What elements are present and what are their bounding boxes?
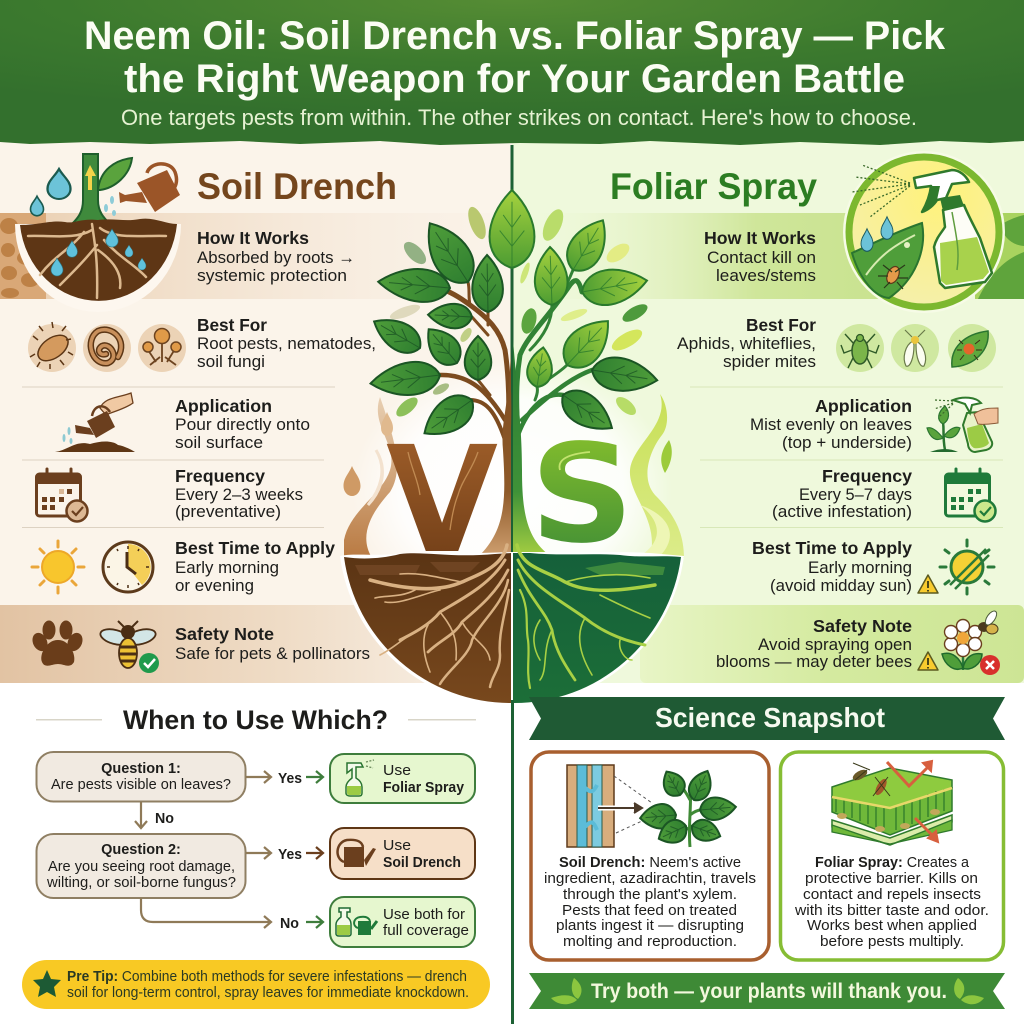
banner: try both: Try both — your plants will thank you. <box>591 980 947 1003</box>
title: the Right Weapon for Your Garden Battle <box>124 57 905 101</box>
text: best time: or evening <box>175 577 254 595</box>
icon: watering can <box>119 164 180 212</box>
icon: crossed-out sun <box>940 540 994 594</box>
text: foliar spray science <box>794 855 989 950</box>
arrow: question 1 no: No <box>155 811 174 827</box>
icon: hand spraying plant <box>927 398 998 452</box>
banner: science snapshot <box>529 697 1005 740</box>
text: best for: soil fungi <box>197 353 265 371</box>
text: application: Application <box>815 396 912 416</box>
vapor wisp: soil side <box>344 397 397 558</box>
text: frequency: (active infestation) <box>772 503 912 521</box>
text: how it works: How It Works <box>704 228 816 248</box>
icon: xylem cross-section <box>567 765 655 847</box>
arrow: question 2 yes <box>246 847 323 863</box>
band: soil drench how it works <box>0 213 490 299</box>
text: frequency: Every 5–7 days <box>799 486 912 504</box>
tree trunk: spray side <box>513 340 552 557</box>
title: Neem Oil: Soil Drench vs. Foliar Spray — Pick <box>84 14 946 58</box>
icon: flower bee and no sign <box>942 609 1000 675</box>
text: application: soil surface <box>175 434 263 452</box>
banner: try both <box>529 973 1005 1009</box>
text: best for: Best For <box>197 315 267 335</box>
text: safety note: blooms — may deter bees <box>716 653 912 671</box>
text: how it works <box>197 228 355 285</box>
icon: sun <box>32 541 84 593</box>
panel: soil drench content <box>15 154 397 673</box>
subtitle: One targets pests from within. The other strikes on contact. Here's how to choose. <box>121 105 917 130</box>
icon: leaves left <box>551 978 581 1004</box>
text: frequency: Every 2–3 weeks <box>175 486 303 504</box>
text: foliar spray science: with its bitter taste and odor. <box>794 903 989 919</box>
text: application: (top + underside) <box>782 434 912 452</box>
card: foliar spray science <box>780 752 1004 960</box>
text: frequency: Frequency <box>822 466 912 486</box>
text: frequency: (preventative) <box>175 503 281 521</box>
icon: clock <box>103 542 153 592</box>
flow box: question 1 <box>36 752 246 802</box>
text: how it works <box>704 228 816 285</box>
heading: when to use which: When to Use Which? <box>123 705 388 735</box>
text: frequency <box>772 466 912 521</box>
text: best time: Best Time to Apply <box>752 538 912 558</box>
text: foliar spray science: protective barrier. Kills on <box>805 871 978 887</box>
text: best time <box>752 538 912 595</box>
band: foliar spray how it works <box>540 213 1024 299</box>
result: use both: Use both for <box>383 907 465 923</box>
text: soil drench science <box>544 855 756 950</box>
text: how it works: How It Works <box>197 228 309 248</box>
icon: star <box>33 970 61 997</box>
text: best time: (avoid midday sun) <box>770 577 912 595</box>
band: foliar spray safety <box>640 605 1024 683</box>
result: use foliar spray: Use <box>383 763 411 779</box>
text: application <box>175 396 310 452</box>
text: best time: Early morning <box>175 559 279 577</box>
arrow: question 1 yes: Yes <box>278 771 302 787</box>
arrow: question 2 yes: Yes <box>278 847 302 863</box>
text: how it works: Contact kill on <box>707 249 816 267</box>
tip text: soil for long-term control, spray leaves for immediate knockdown. <box>67 985 469 1001</box>
text: best time: Early morning <box>808 559 912 577</box>
tip text <box>67 969 469 1001</box>
text: soil drench science: molting and reproduction. <box>563 934 737 950</box>
text: safety note: Safety Note <box>175 624 274 644</box>
flow box: question 1: Are pests visible on leaves? <box>51 777 231 793</box>
text: soil drench science: ingredient, azadirachtin, travels <box>544 871 756 887</box>
result: use foliar spray <box>330 754 475 803</box>
roots: soil side <box>370 545 509 687</box>
text: frequency: Frequency <box>175 466 265 486</box>
text: foliar spray science: contact and repels insects <box>803 887 981 903</box>
icon: leaves right <box>954 978 984 1004</box>
flow box: question 2 <box>36 834 246 898</box>
text: foliar spray science: before pests multiply. <box>820 934 964 950</box>
text: safety note <box>716 616 912 671</box>
flow box: question 1: Question 1: <box>101 761 181 777</box>
flow box: question 2: wilting, or soil-borne fungus? <box>46 875 236 891</box>
result: use soil drench: Use <box>383 838 411 854</box>
icon: warning triangle <box>918 575 938 593</box>
roots: spray side <box>517 545 655 688</box>
text: soil drench science: Pests that feed on treated <box>562 903 737 919</box>
card: soil drench science <box>531 752 769 960</box>
text: foliar spray science: Foliar Spray: Creates a <box>815 855 970 871</box>
text: how it works: Absorbed by roots → <box>197 249 355 267</box>
panel: soil drench background <box>0 140 512 683</box>
icon: hand pouring watering can <box>55 393 135 452</box>
tree branches: soil side <box>440 282 509 440</box>
leaves: spray side <box>490 190 660 441</box>
text: foliar spray science: Works best when applied <box>807 918 977 934</box>
text: safety note: Avoid spraying open <box>758 636 912 654</box>
heading: Foliar Spray: Foliar Spray <box>610 166 817 207</box>
text: best time <box>175 538 335 595</box>
icon: calendar <box>36 469 88 522</box>
text: how it works: systemic protection <box>197 267 347 285</box>
text: best for <box>197 315 376 371</box>
panel: when to use which <box>22 705 490 1009</box>
flow box: question 2: Are you seeing root damage, <box>48 859 235 875</box>
result: use soil drench: Soil Drench <box>383 855 461 871</box>
text: soil drench science: Soil Drench: Neem's active <box>559 855 741 871</box>
icon: paw <box>30 620 85 666</box>
header banner <box>0 0 1024 145</box>
text: how it works: leaves/stems <box>716 267 816 285</box>
vapor wisp: spray side <box>630 394 684 558</box>
text: application: Application <box>175 396 272 416</box>
panel: foliar spray content <box>610 151 1005 675</box>
result: use both: full coverage <box>383 923 469 939</box>
text: frequency <box>175 466 303 521</box>
center illustration: tree, VS and soil <box>340 145 684 706</box>
text: best time: Best Time to Apply <box>175 538 335 558</box>
text: safety note: Safe for pets & pollinators <box>175 645 370 663</box>
text: safety note <box>175 624 370 663</box>
icon: leaf cross-section <box>832 761 952 845</box>
center divider <box>510 145 514 701</box>
result: use soil drench <box>330 828 475 879</box>
icon: plant <box>639 767 737 849</box>
heading: Soil Drench: Soil Drench <box>197 166 397 207</box>
arrow: question 1 yes <box>246 771 323 787</box>
panel: foliar spray background <box>512 140 1024 683</box>
text: safety note: Safety Note <box>813 616 912 636</box>
arrow: question 2 no <box>141 898 323 932</box>
result: use both <box>330 897 475 947</box>
tip text: Pre Tip: Combine both methods for severe infestations — drench <box>67 969 467 985</box>
text: best for: Best For <box>746 315 816 335</box>
tree branches: spray side <box>517 270 592 440</box>
icons: leaf pests <box>836 324 996 372</box>
icon: bee with check <box>99 621 159 673</box>
text: application: Mist evenly on leaves <box>750 416 912 434</box>
lower divider <box>511 700 514 1024</box>
result: use foliar spray: Foliar Spray <box>383 780 464 796</box>
text: best for: Root pests, nematodes, <box>197 335 376 353</box>
icon: spray bottle circle <box>843 151 1005 313</box>
leaves: soil side <box>367 205 503 446</box>
arrow: question 1 no <box>135 802 174 828</box>
text: best for: spider mites <box>723 353 816 371</box>
title <box>84 14 946 101</box>
flow box: question 2: Question 2: <box>101 842 181 858</box>
text: soil drench science: through the plant's xylem. <box>563 887 737 903</box>
soil semicircle <box>340 552 684 706</box>
banner: science snapshot: Science Snapshot <box>655 702 885 733</box>
callout: pro tip <box>22 960 490 1009</box>
tree trunk: soil side <box>478 340 511 557</box>
arrow: question 2 no: No <box>280 916 299 932</box>
text: best for: Aphids, whiteflies, <box>677 335 816 353</box>
panel: science snapshot <box>529 697 1005 1009</box>
icon: soil and plant circle <box>15 154 181 312</box>
letter V: V <box>386 415 498 586</box>
icon: calendar <box>946 469 996 522</box>
icon: spray bottle <box>914 170 992 288</box>
text: best for <box>677 315 816 371</box>
icons: soil pests <box>28 322 186 372</box>
text: application <box>750 396 912 452</box>
icon: warning triangle <box>918 652 938 670</box>
text: application: Pour directly onto <box>175 416 310 434</box>
band: soil drench safety <box>0 605 470 683</box>
text: soil drench science: plants ingest it — disrupting <box>556 918 744 934</box>
letter S: S <box>530 416 634 574</box>
